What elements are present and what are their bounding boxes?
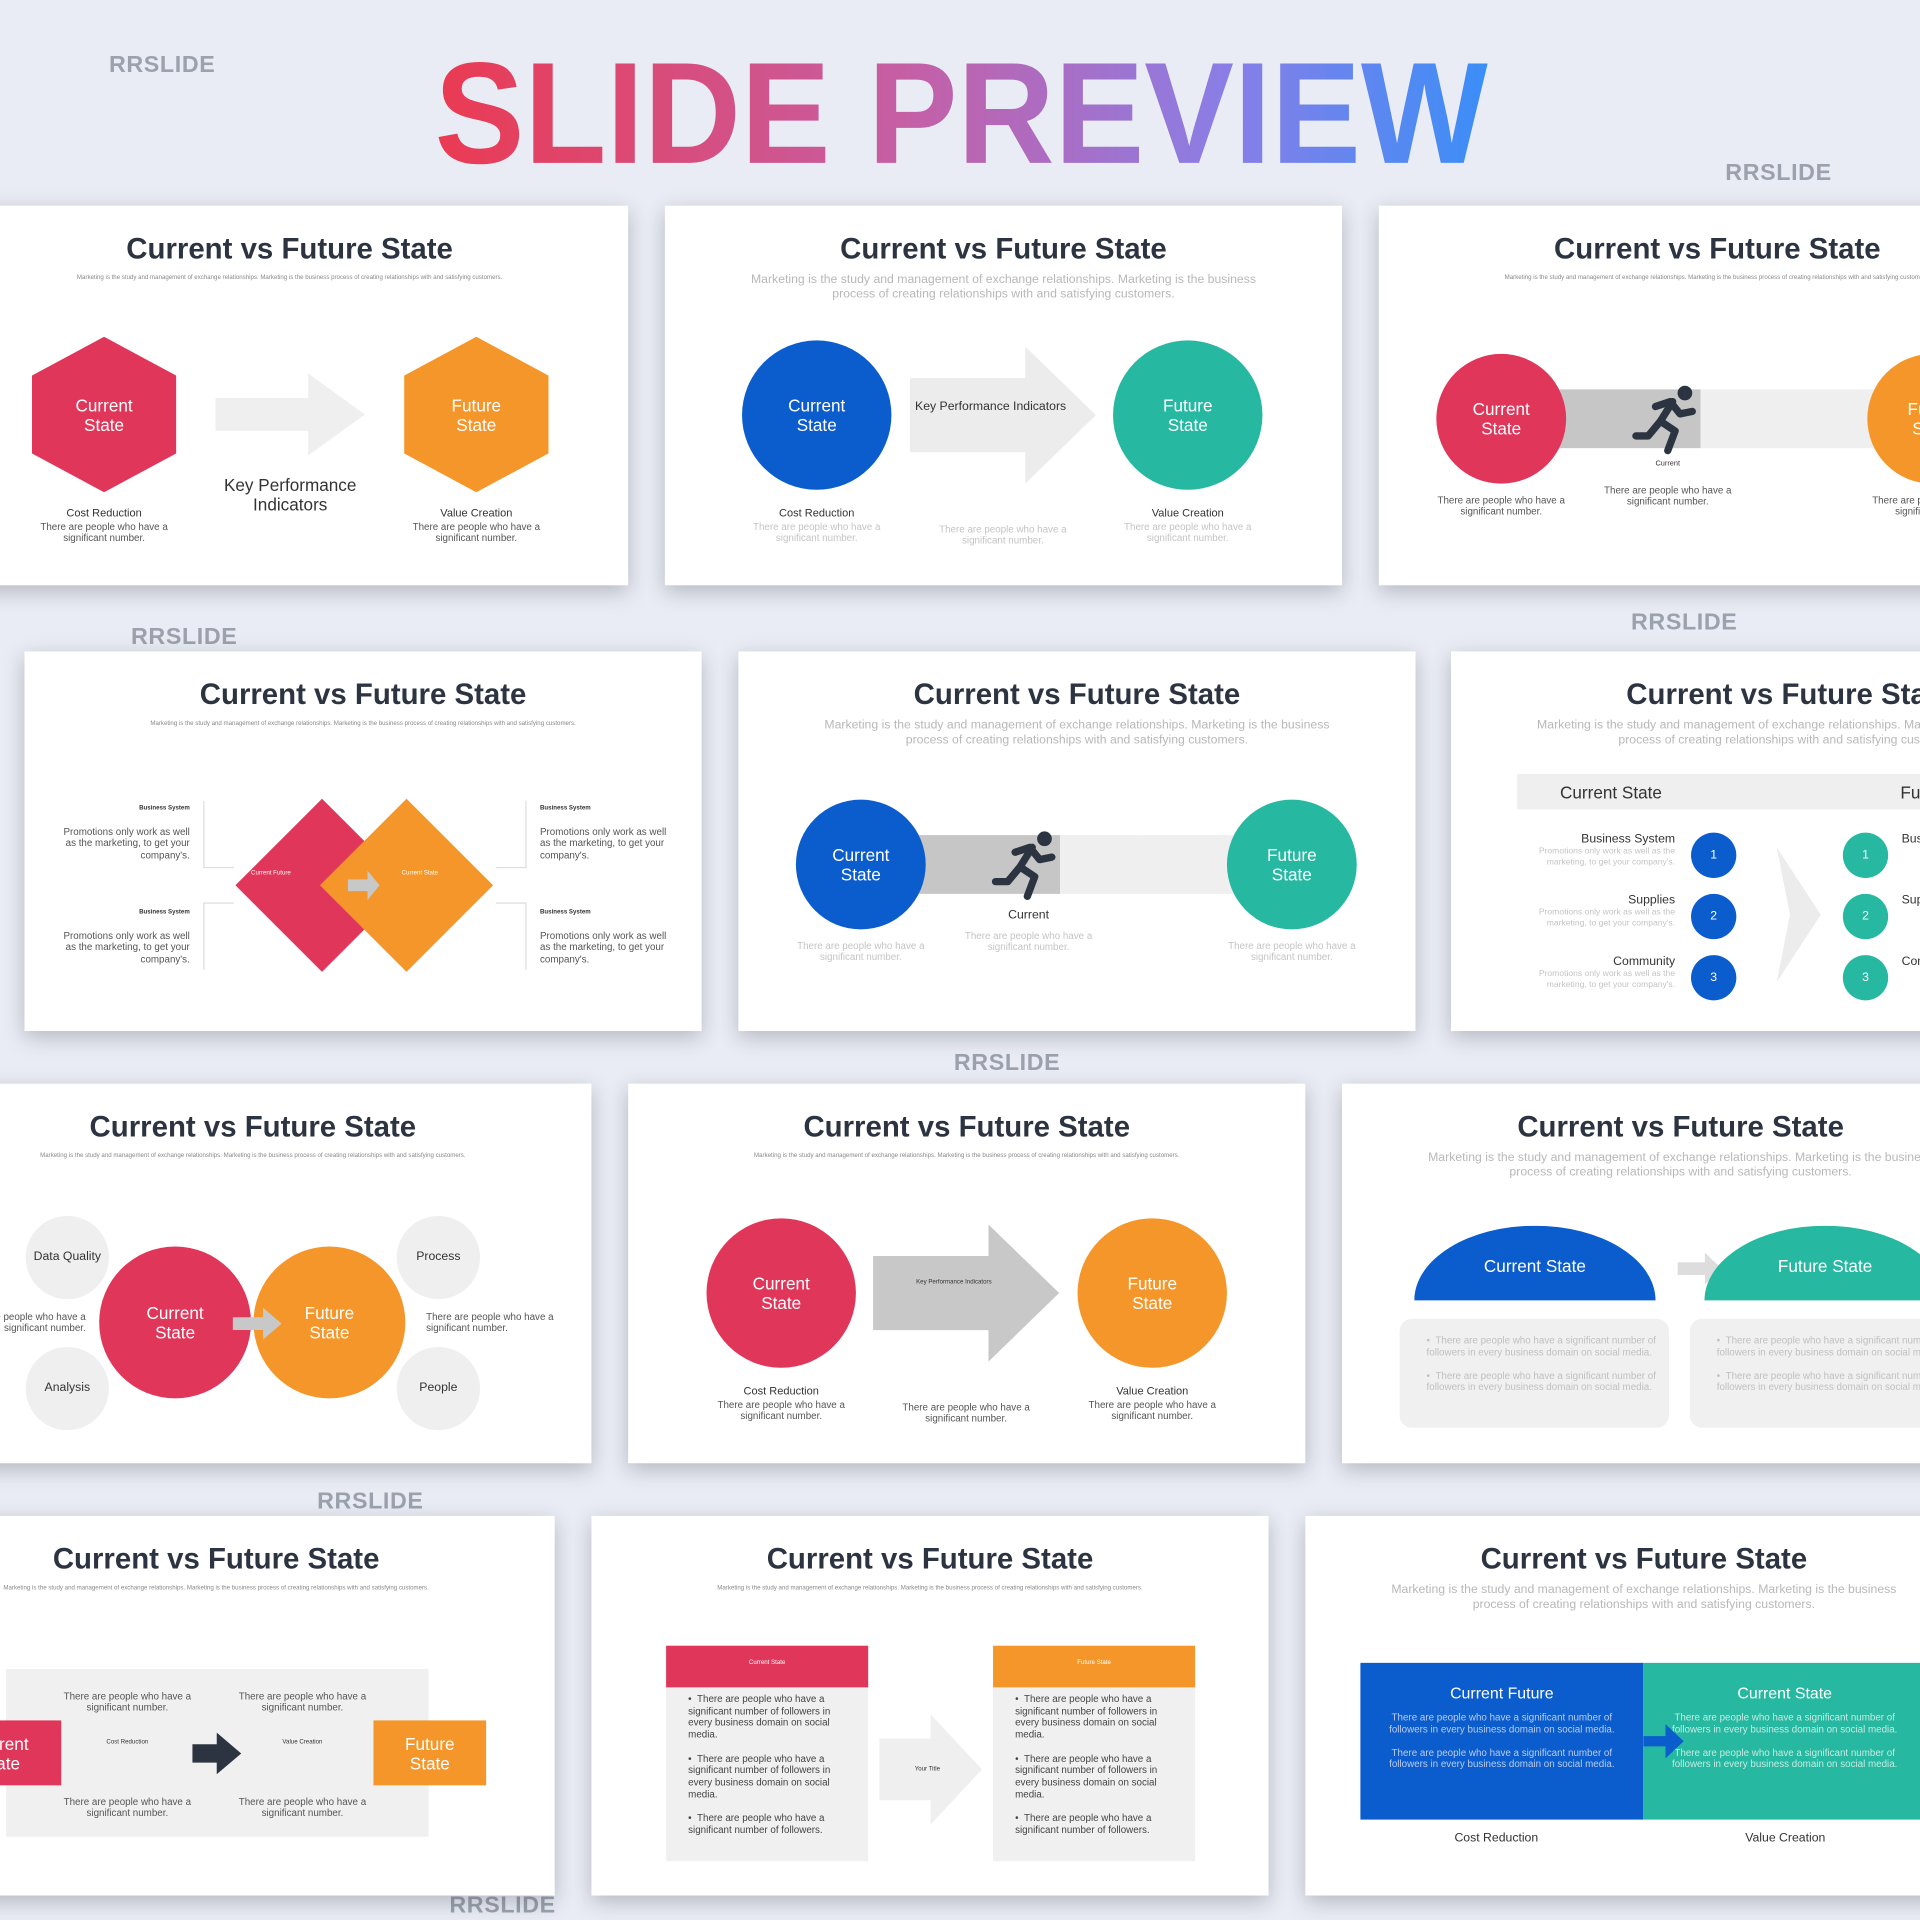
slide F: numbered lists: 2 (1710, 909, 1717, 923)
slide F: numbered lists (1451, 651, 1920, 1031)
circle future: State (1168, 415, 1208, 435)
slide H: circles with gray arrow: Key Performance Indicators (916, 1278, 992, 1286)
hexagon current: Current (75, 395, 133, 414)
hexagon future: State (456, 414, 496, 434)
dome future (1704, 1226, 1920, 1300)
slide A: hexagons (0, 206, 628, 585)
label value: There are people who have a significant number. (413, 522, 540, 544)
column future: • There are people who have a significant number of followers. (1015, 1812, 1151, 1835)
slide F: numbered lists: Promotions only work as well as the marketing, to get your company's. (1539, 909, 1675, 928)
arrow (216, 373, 365, 456)
slide H: circles with gray arrow: Current vs Future State (803, 1111, 1130, 1144)
column future: Future State (1077, 1659, 1111, 1667)
circle future: State (309, 1322, 349, 1342)
arrow KPI (910, 347, 1096, 484)
slide F: numbered lists: 1 (1862, 848, 1869, 861)
circle future (1227, 800, 1357, 929)
boxes: • There are people who have a significant number of followers in every business domain on social media. (1427, 1370, 1656, 1392)
slide B: circles with KPI arrow: Value Creation (1152, 507, 1224, 519)
slide B: circles with KPI arrow: There are people who have a significant number. (1124, 522, 1251, 544)
slide B: circles with KPI arrow: There are people who have a significant number. (939, 524, 1067, 546)
slide G: overlapping circles: Current vs Future State (90, 1111, 416, 1144)
arrow (348, 871, 380, 900)
bar (1531, 389, 1920, 448)
block future (373, 1720, 486, 1785)
arrow blue (1643, 1724, 1684, 1758)
circle current: State (761, 1293, 801, 1313)
slide D: diamonds: Promotions only work as well as the marketing, to get your company's. (63, 930, 190, 964)
circle current: Current (1473, 399, 1530, 419)
slide F: numbered lists: 2 (1862, 909, 1869, 923)
slide A: hexagons: Current vs Future State (126, 233, 453, 266)
slide D: diamonds: Promotions only work as well as the marketing, to get your company's. (540, 930, 666, 964)
slide I: domes: Marketing is the study and management of exchange relationships. Marketing is the business process of creating relationships with and satisfying customers. (1428, 1151, 1920, 1179)
circle future (1113, 340, 1262, 490)
panel blue (1360, 1663, 1643, 1820)
slide C: runner bar (1379, 206, 1920, 585)
slide J: gray box with blocks: There are people who have a significant number. (239, 1796, 366, 1818)
column current: • There are people who have a significant number of followers. (688, 1812, 824, 1835)
circle future: Future (305, 1303, 354, 1322)
circle current (742, 340, 891, 490)
right texts: Promotions only work as well as the marketing, to get your company's. (540, 826, 666, 860)
slide H: circles with gray arrow: There are people who have a significant number. (902, 1402, 1030, 1424)
slide J: gray box with blocks: Current vs Future State (53, 1543, 379, 1576)
column current (666, 1646, 868, 1861)
slide B: circles with KPI arrow: Key Performance Indicators (915, 400, 1066, 414)
circle current: Current (147, 1303, 204, 1322)
slide D: diamonds: Current vs Future State (200, 678, 526, 711)
chevron (1777, 847, 1821, 982)
panel green: Current State (1737, 1684, 1832, 1702)
slide G: overlapping circles: People (419, 1381, 457, 1395)
slide H: circles with gray arrow: Cost Reduction (744, 1385, 819, 1397)
slide K: two columns with headers: Marketing is the study and management of exchange relationships. Marketing is the business process of creating relationships with and satisfying customers. (717, 1584, 1143, 1592)
slide G: overlapping circles (0, 1084, 591, 1463)
circle current (796, 800, 926, 929)
slide E: runner bar blue/green: Marketing is the study and management of exchange relationships. Marketing is the business process of creating relationships with and satisfying customers. (824, 719, 1329, 747)
panel green (1643, 1663, 1920, 1820)
circle current (99, 1247, 251, 1398)
boxes: • There are people who have a significant number of followers in every business domain on social media. (1427, 1335, 1656, 1357)
icon runner (1632, 386, 1696, 454)
slide J: gray box with blocks: There are people who have a significant number. (64, 1796, 191, 1818)
slide L: blue and green panels: Marketing is the study and management of exchange relationships. Marketing is the business process of creating relationships with and satisfying customers. (1391, 1583, 1896, 1611)
panel green: There are people who have a significant number of followers in every business domain on social media. (1672, 1747, 1897, 1769)
slide E: runner bar blue/green: Current (1008, 909, 1049, 922)
circle current: State (797, 415, 837, 435)
small circles: Data Quality (34, 1250, 101, 1264)
slide F: numbered lists: Current State (1560, 782, 1662, 802)
slide G: overlapping circles: Marketing is the study and management of exchange relationships. Marketing is the business process of creating relationships with and satisfying customers. (40, 1152, 466, 1160)
watermark: RRSLIDE (317, 1489, 424, 1515)
slide D: diamonds: Current Future (251, 869, 291, 877)
slide C: runner bar: There are people who have a significant number. (1437, 495, 1565, 517)
circle current: State (841, 864, 881, 884)
hexagon current (32, 337, 176, 492)
slide F: numbered lists: Community (1613, 955, 1675, 969)
slide J: gray box with blocks (0, 1516, 555, 1896)
slide J: gray box with blocks: Marketing is the study and management of exchange relationships. Marketing is the business process of creating relationships with and satisfying customers. (3, 1584, 429, 1592)
circle future (1078, 1218, 1227, 1368)
circle current: Current (788, 396, 845, 415)
circle current: Current (753, 1273, 810, 1293)
slide D: diamonds: Business System (139, 909, 190, 916)
slide C: runner bar: Current (1655, 460, 1680, 468)
slide G: overlapping circles: Analysis (45, 1381, 90, 1395)
slide C: runner bar: Marketing is the study and management of exchange relationships. Marketing is the business process of creating relationships with and satisfying customers. (1505, 274, 1920, 282)
slide H: circles with gray arrow: Value Creation (1116, 1385, 1188, 1397)
panel blue: There are people who have a significant number of followers in every business domain on social media. (1389, 1712, 1615, 1734)
slide J: gray box with blocks: Cost Reduction (106, 1739, 148, 1746)
slide K: two columns with headers: Your Title (915, 1766, 940, 1773)
left texts: Business System (139, 804, 190, 812)
slide H: circles with gray arrow: Marketing is the study and management of exchange relationships. Marketing is the business process of creating relationships with and satisfying customers. (754, 1152, 1179, 1160)
left texts: Promotions only work as well as the marketing, to get your company's. (63, 826, 190, 860)
slide F: numbered lists: Supplies (1628, 894, 1675, 907)
circle future (253, 1247, 405, 1398)
circle future: State (1272, 864, 1312, 884)
slide K: two columns with headers: Current vs Future State (767, 1543, 1093, 1576)
slide F: numbered lists: 3 (1710, 970, 1717, 984)
left texts (63, 804, 190, 860)
hexagon future (404, 337, 549, 492)
circle future: Future (1163, 396, 1213, 415)
slide D: diamonds: Business System (540, 909, 591, 916)
circle future (1867, 354, 1920, 484)
dome current (1414, 1226, 1656, 1300)
slide I: domes (1342, 1084, 1920, 1463)
slide F: numbered lists: Promotions only work as well as the marketing, to get your company's. (1539, 970, 1675, 989)
slide L: blue and green panels (1305, 1516, 1920, 1896)
label cost (40, 507, 168, 544)
slide L: blue and green panels: Current vs Future State (1481, 1543, 1807, 1576)
slide H: circles with gray arrow: There are people who have a significant number. (1089, 1400, 1216, 1422)
slide I: domes: Future State (1778, 1256, 1872, 1276)
slide E: runner bar blue/green: There are people who have a significant number. (797, 940, 925, 962)
slide C: runner bar: There are people who have a significant number. (1604, 485, 1731, 507)
slide J: gray box with blocks: There are people who have a significant number. (239, 1691, 366, 1713)
column current: • There are people who have a significant number of followers in every business domain on social media. (688, 1753, 830, 1800)
slide B: circles with KPI arrow: Current vs Future State (840, 233, 1167, 266)
slide D: diamonds (24, 651, 702, 1031)
panel blue: Current Future (1450, 1684, 1554, 1702)
arrow dark (192, 1733, 241, 1774)
slide E: runner bar blue/green: There are people who have a significant number. (1228, 940, 1356, 962)
arrow (879, 1714, 982, 1824)
panel blue: There are people who have a significant number of followers in every business domain on social media. (1389, 1747, 1615, 1769)
watermark: RRSLIDE (131, 624, 237, 650)
label value (412, 507, 540, 544)
boxes (1400, 1319, 1669, 1428)
circle future: Future (1127, 1273, 1177, 1293)
slide B: circles with KPI arrow (665, 206, 1342, 585)
rows: Business System (1581, 833, 1675, 846)
arrow (1678, 1253, 1722, 1284)
slide K: two columns with headers (591, 1516, 1269, 1896)
slide E: runner bar blue/green (738, 651, 1416, 1031)
icon runner (992, 831, 1056, 900)
labels: Cost Reduction (779, 507, 854, 519)
slide A: hexagons: Marketing is the study and management of exchange relationships. Marketing is the business process of creating relationships with and satisfying customers. (77, 274, 502, 282)
watermark: RRSLIDE (109, 53, 215, 78)
arrow (873, 1224, 1059, 1362)
header bar (1517, 774, 1920, 809)
slide G: overlapping circles: Process (416, 1250, 460, 1264)
slide I: domes: Current vs Future State (1517, 1111, 1844, 1144)
right texts: Business System (540, 804, 591, 812)
rows (1539, 833, 1675, 867)
block future: State (410, 1753, 450, 1772)
circle current (1436, 354, 1566, 484)
labels: There are people who have a significant number. (753, 522, 880, 544)
slide F: numbered lists: 3 (1862, 970, 1869, 984)
KPI label: Key Performance Indicators (224, 475, 356, 514)
slide L: blue and green panels: Cost Reduction (1454, 1832, 1538, 1845)
watermark: RRSLIDE (449, 1893, 556, 1919)
watermark: RRSLIDE (1631, 610, 1737, 636)
column future: • There are people who have a significant number of followers in every business domain on social media. (1015, 1693, 1157, 1740)
diamond future (320, 799, 493, 972)
watermark: RRSLIDE (1725, 160, 1832, 186)
slide H: circles with gray arrow (628, 1084, 1305, 1463)
label value: Value Creation (440, 507, 512, 519)
small circles (26, 1216, 109, 1299)
slide H: circles with gray arrow: There are people who have a significant number. (717, 1400, 845, 1422)
circle current: State (1481, 419, 1521, 438)
slide J: gray box with blocks: Value Creation (282, 1739, 322, 1746)
column future: • There are people who have a significant number of followers in every business domain on social media. (1015, 1753, 1157, 1800)
slide F: numbered lists: 1 (1710, 848, 1717, 861)
watermark: RRSLIDE (954, 1051, 1060, 1076)
panel green: There are people who have a significant number of followers in every business domain on social media. (1672, 1712, 1897, 1734)
diamond current (235, 799, 409, 972)
hexagon current: State (84, 414, 124, 434)
column current: • There are people who have a significant number of followers in every business domain on social media. (688, 1693, 830, 1740)
label cost: There are people who have a significant number. (40, 522, 168, 544)
slide J: gray box with blocks: There are people who have a significant number. (64, 1691, 191, 1713)
block future: Future (405, 1733, 455, 1753)
slide L: blue and green panels: Value Creation (1745, 1832, 1825, 1845)
slide E: runner bar blue/green: There are people who have a significant number. (965, 931, 1092, 953)
slide C: runner bar: Current vs Future State (1554, 233, 1881, 266)
slide E: runner bar blue/green: Current vs Future State (914, 678, 1240, 711)
circle current (707, 1218, 856, 1368)
labels (753, 507, 880, 544)
slide I: domes: Current State (1484, 1256, 1586, 1276)
slide D: diamonds: Current State (402, 869, 438, 877)
hexagon future: Future (452, 395, 501, 414)
column future (993, 1646, 1195, 1861)
slide B: circles with KPI arrow: Marketing is the study and management of exchange relationships. Marketing is the business process of creating relationships with and satisfying customers. (751, 273, 1256, 301)
circle current: State (155, 1322, 195, 1342)
block current (0, 1720, 61, 1785)
slide G: overlapping circles: There are people who have a significant number. (426, 1311, 554, 1333)
label cost: Cost Reduction (66, 507, 142, 519)
circle future: Future (1267, 845, 1317, 864)
right texts (540, 804, 666, 860)
circle future: State (1132, 1293, 1172, 1313)
column current: Current State (749, 1659, 785, 1667)
rows: Promotions only work as well as the marketing, to get your company's. (1539, 847, 1675, 867)
circle current: Current (832, 845, 889, 864)
slide D: diamonds: Marketing is the study and management of exchange relationships. Marketing is the business process of creating relationships with and satisfying customers. (150, 720, 576, 727)
